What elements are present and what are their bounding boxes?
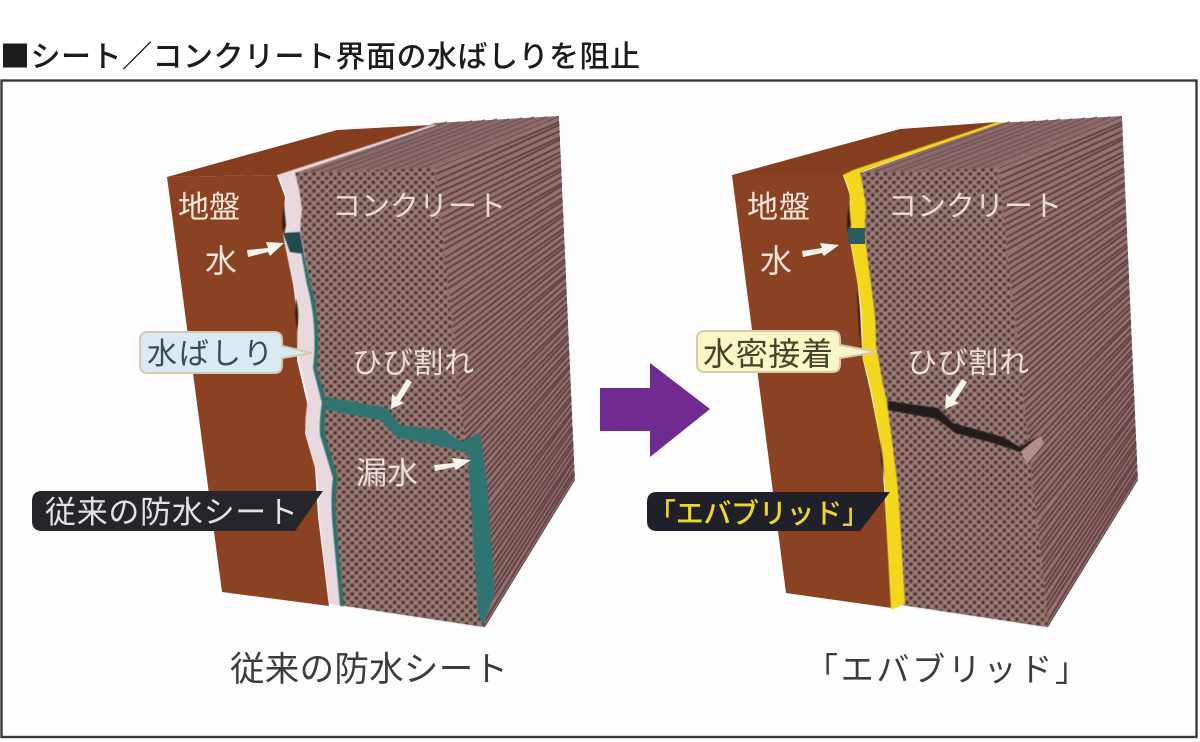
conventional sheet — [277, 125, 437, 606]
panel: hybrid sheet block — [647, 110, 1138, 633]
panel: conventional waterproof sheet block — [32, 110, 575, 633]
caption: hybrid: 「エバブリッド」 — [805, 643, 1088, 691]
callout: watertight bond: 水密接着 — [703, 329, 833, 375]
label: ground: 地盤 — [178, 182, 240, 227]
caption: conventional sheet: 従来の防水シート — [230, 641, 508, 691]
label: crack: ひび割れ — [352, 338, 474, 382]
arrow: to water — [802, 243, 839, 257]
arrow: to crack — [391, 379, 412, 409]
label: leakage: 漏水 — [356, 448, 418, 493]
concrete block — [858, 110, 1138, 633]
tag: hybrid: 「エバブリッド」 — [648, 492, 870, 532]
arrow: conventional to hybrid — [600, 363, 710, 457]
water between sheet and concrete — [283, 232, 344, 606]
label: ground: 地盤 — [747, 182, 810, 227]
leak through crack — [327, 397, 495, 625]
label: concrete: コンクリート — [888, 183, 1062, 225]
concrete block — [295, 110, 575, 633]
tag: conventional sheet: 従来の防水シート — [45, 487, 298, 532]
sealed crack — [888, 401, 1044, 464]
sheet shadow on ground — [282, 205, 306, 432]
arrow: to leak — [434, 458, 471, 471]
label: concrete: コンクリート — [332, 183, 506, 225]
hybrid sheet — [843, 122, 1002, 610]
title: ■シート／コンクリート界面の水ばしりを阻止 — [0, 32, 640, 76]
arrow: to water — [247, 242, 284, 257]
arrow: to crack — [945, 379, 967, 409]
water pocket — [848, 228, 865, 244]
callout: water channeling: 水ばしり — [147, 329, 273, 373]
ground block — [732, 122, 998, 608]
label: water: 水 — [205, 236, 237, 282]
label: crack: ひび割れ — [907, 338, 1029, 382]
sheet shadow on ground — [847, 205, 884, 480]
ground block — [167, 125, 432, 606]
label: water: 水 — [760, 236, 792, 282]
